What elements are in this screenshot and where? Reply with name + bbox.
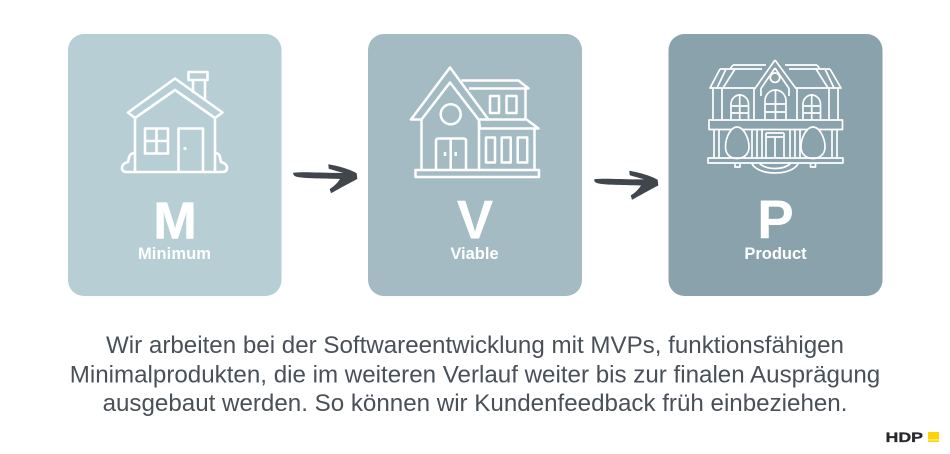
- label Viable: Viable: [450, 245, 499, 263]
- icon: small house: [122, 72, 227, 172]
- letter V: V: [457, 188, 494, 250]
- panel: Product: [668, 34, 882, 296]
- logo: HDP: HDP: [886, 430, 923, 445]
- description text: [70, 332, 880, 417]
- logo: HDP: [886, 430, 939, 445]
- icon: mansion: [708, 60, 843, 173]
- icon: medium house: [411, 68, 539, 177]
- letter P: P: [757, 188, 794, 250]
- arrow 1: [293, 164, 357, 193]
- description text: Minimalprodukten, die im weiteren Verlauf weiter bis zur finalen Ausprägung: [70, 361, 880, 388]
- label Minimum: Minimum: [138, 245, 211, 263]
- arrow 2: [594, 171, 658, 200]
- label Product: Product: [744, 245, 807, 263]
- description text: Wir arbeiten bei der Softwareentwicklung mit MVPs, funktionsfähigen: [106, 332, 844, 359]
- panel: Minimum: [68, 34, 282, 296]
- panel: Viable: [368, 34, 582, 296]
- description text: ausgebaut werden. So können wir Kundenfeedback früh einbeziehen.: [103, 390, 847, 417]
- letter M: M: [153, 192, 197, 250]
